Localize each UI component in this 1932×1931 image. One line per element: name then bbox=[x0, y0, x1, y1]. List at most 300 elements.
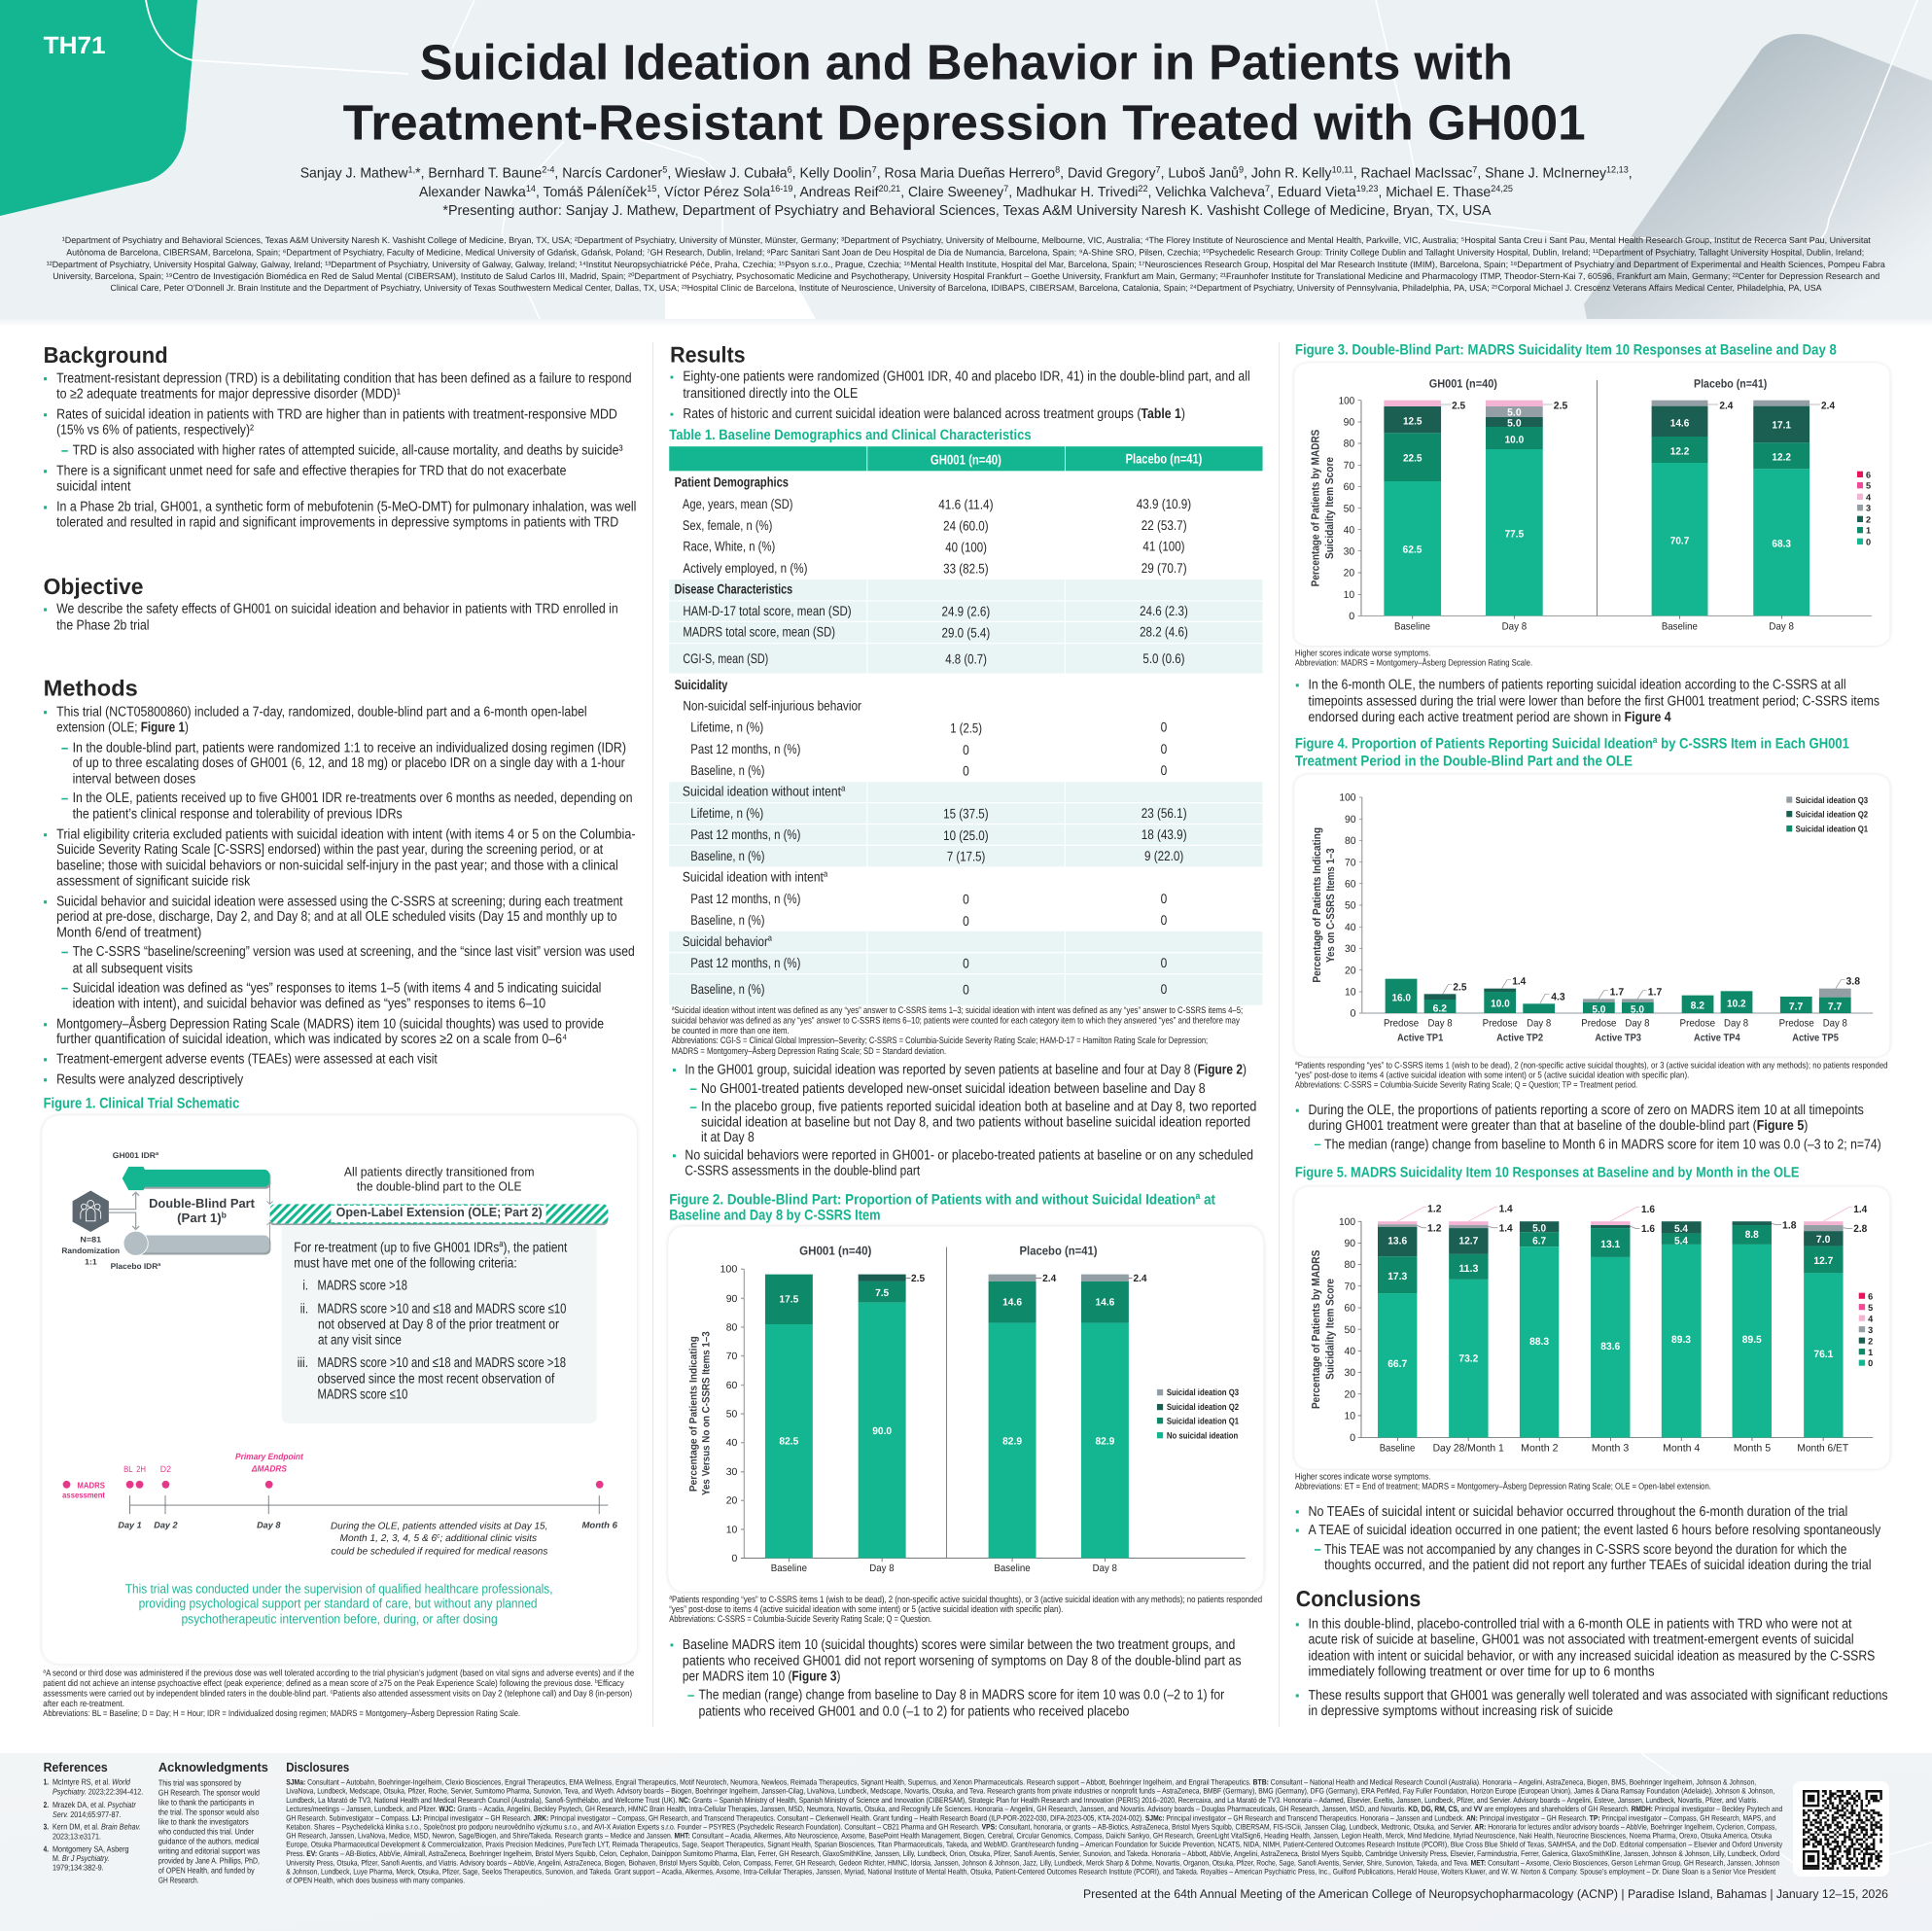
schematic labels: assessment bbox=[62, 1491, 105, 1500]
shaded rows bbox=[669, 579, 1263, 1005]
chart labels: 50 bbox=[1345, 899, 1355, 911]
schematic labels: 2H bbox=[136, 1464, 146, 1474]
chart labels: Month 6/ET bbox=[1797, 1442, 1848, 1454]
text block: references list: 1979;134:382-9. bbox=[53, 1863, 104, 1873]
chart labels: 7.7 bbox=[1789, 1001, 1803, 1012]
icon: QR code bbox=[1793, 1781, 1889, 1877]
y-axis title bbox=[1310, 1250, 1336, 1409]
schematic labels: Day 1 bbox=[118, 1521, 142, 1530]
text block: results bullets bbox=[670, 369, 1250, 421]
text block: methods bullets: ideation with intent), and suicidal behavior was defined as “yes” responses to items 6–10 bbox=[73, 995, 545, 1011]
chart labels: 10.2 bbox=[1727, 998, 1746, 1009]
y-axis title: Percentage of Patients Indicating bbox=[686, 1336, 699, 1492]
chart labels: 5.0 bbox=[1592, 1003, 1605, 1015]
chart labels: 7.5 bbox=[875, 1287, 889, 1298]
text block: references list: 4. bbox=[44, 1844, 49, 1853]
chart labels: 30 bbox=[726, 1466, 737, 1478]
table text bbox=[675, 451, 1202, 998]
schematic labels: ΔMADRS bbox=[252, 1464, 287, 1474]
text block: methods bullets: extension (OLE; Figure 1) bbox=[56, 719, 189, 735]
text block: methods bullets: The C-SSRS “baseline/screening” version was used at screening, and the “since last visit” version was used bbox=[73, 943, 635, 959]
table text: 0 bbox=[1161, 742, 1167, 756]
schematic labels: could be scheduled if required for medical reasons bbox=[331, 1545, 548, 1557]
chart labels: 12.7 bbox=[1813, 1254, 1833, 1266]
chart labels: 50 bbox=[726, 1408, 737, 1420]
text block: Table 1 footnotes: Abbreviations: CGI-S = Clinical Global Impression–Severity; C-SSRS = Columbia-Suicide Severity Rating Scale; HAM-D-17 = Hamilton Rating Scale for Depression; bbox=[672, 1036, 1208, 1046]
chart labels: 2.4 bbox=[1719, 400, 1734, 411]
text block: Figure 1 footnotes: Abbreviations: BL = Baseline; D = Day; H = Hour; IDR = Individualized dosing regimen; MADRS = Montgomery–Åsberg Depression Rating Scale. bbox=[43, 1708, 520, 1718]
table text: Age, years, mean (SD) bbox=[683, 497, 793, 511]
table text: 28.2 (4.6) bbox=[1140, 625, 1188, 640]
panel: acknowledgments bbox=[158, 1760, 268, 1885]
bar: open-label extension bbox=[270, 1204, 608, 1225]
chart labels: Suicidal ideation Q3 bbox=[1796, 795, 1868, 805]
schematic labels: During the OLE, patients attended visits at Day 15, bbox=[331, 1520, 547, 1531]
chart labels: 5 bbox=[1868, 1303, 1873, 1313]
text block: Table 1 footnotes: aSuicidal ideation without intent was defined as any “yes” answer to C-SSRS items 1–3; suicidal ideation with intent was defined as any “yes” answer to C-SSRS items 4–5; bbox=[672, 1004, 1243, 1016]
chart: Figure 5 stacked bars bbox=[1294, 1187, 1889, 1469]
text block: Figure 1 footnotes: patient did not achieve an intense psychoactive effect (peak experience; defined as a mean score of ≥75 on the Peak Experience Scale) following the previous dose. bEfficacy bbox=[43, 1678, 624, 1688]
text block: methods bullets: Montgomery–Åsberg Depression Rating Scale (MADRS) item 10 (suicidal thoughts) was used to provide bbox=[56, 1015, 604, 1032]
table text: Suicidal behaviora bbox=[683, 933, 772, 949]
table text: 23 (56.1) bbox=[1142, 806, 1187, 821]
heading: Figure 4: Treatment Period in the Double-Blind Part and the OLE bbox=[1295, 753, 1633, 769]
text block: Figure 3 footnotes bbox=[1295, 648, 1532, 667]
chart labels: 8.8 bbox=[1745, 1229, 1759, 1241]
text block: results bullets after Table 1: No suicidal behaviors were reported in GH001- or placebo-treated patients at baseline or on any scheduled bbox=[685, 1147, 1253, 1163]
text block: references list: Psychiatry. 2023;22:394-412. bbox=[53, 1787, 143, 1797]
chart labels: 0 bbox=[1349, 610, 1354, 621]
text block: Figure 2 footnotes: aPatients responding “yes” to C-SSRS items 1 (wish to be dead), 2 (non-specific active suicidal thoughts), or 3 (active suicidal ideation with any methods); no patients responded bbox=[669, 1594, 1262, 1604]
chart labels: 70 bbox=[1345, 857, 1355, 868]
table text: 9 (22.0) bbox=[1144, 849, 1183, 863]
chart labels: 10 bbox=[1345, 1410, 1355, 1422]
chart labels: 2.8 bbox=[1853, 1223, 1867, 1234]
chart labels: 3 bbox=[1866, 504, 1871, 513]
chart labels: 73.2 bbox=[1458, 1352, 1478, 1364]
table text: 18 (43.9) bbox=[1142, 827, 1187, 842]
chart labels: Active TP2 bbox=[1496, 1032, 1543, 1043]
chart labels: 0 bbox=[732, 1553, 737, 1563]
table text: 41 (100) bbox=[1142, 540, 1185, 554]
chart labels: Predose bbox=[1680, 1017, 1715, 1029]
chart labels: Month 4 bbox=[1663, 1442, 1700, 1454]
chart labels: 1.4 bbox=[1499, 1222, 1513, 1234]
chart labels: Day 8 bbox=[1427, 1017, 1453, 1029]
text block: background bullets: TRD is also associated with higher rates of attempted suicide, all-cause mortality, and deaths by suicide³ bbox=[73, 441, 623, 458]
table text: 5.0 (0.6) bbox=[1142, 651, 1185, 666]
text block: methods bullets: baseline; those with suicidal behaviors or non-suicidal self-injury in the past year; and those with a clinical bbox=[56, 857, 618, 872]
text block: Figure 5 footnotes: Higher scores indicate worse symptoms. bbox=[1295, 1471, 1430, 1482]
schematic labels: Day 8 bbox=[257, 1521, 281, 1530]
heading: Figure 4 bbox=[1295, 735, 1849, 769]
chart labels: 5.0 bbox=[1532, 1222, 1546, 1234]
bar: GH001 day 8 bbox=[859, 1275, 906, 1558]
affiliations: University, Barcelona, Spain; ¹⁹Centro de Investigación Biomédica en Red de Salud Mental (CIBERSAM), Instituto de Salud Carlos III, Madrid, Spain; ²⁰Department of Psychiatry, Psychosomatic Medicine and Psychotherapy, University Hospital Frankfurt – Goethe University, Frankfurt am Main, Germany; ²¹Fraunhofer Institute for Translational Medicine and Pharmacology ITMP, Theodor-Stern-Kai 7, 60596, Frankfurt am Main, Germany; ²²Center for Depression Research and bbox=[53, 271, 1879, 281]
chart labels: Day 8 bbox=[869, 1562, 895, 1573]
chart labels: Baseline bbox=[994, 1562, 1031, 1573]
text block: methods bullets: further quantification of suicidal ideation, which was indicated by scores ≥2 on a scale from 0–6⁴ bbox=[56, 1031, 567, 1046]
panel: right column upper bbox=[1294, 341, 1889, 724]
bars: Active TP1 bbox=[1386, 979, 1456, 1013]
chart labels: 1.4 bbox=[1853, 1204, 1867, 1215]
chart labels: 40 bbox=[726, 1437, 737, 1448]
heading: Background: Background bbox=[44, 342, 168, 368]
text block: acknowledgments: writing and editorial support was bbox=[158, 1846, 260, 1856]
chart labels: 2.5 bbox=[1452, 400, 1465, 411]
text block: methods bullets: assessment of significant suicide risk bbox=[56, 872, 250, 889]
chart labels: 2 bbox=[1868, 1336, 1873, 1347]
chart labels: Suicidal ideation Q2 bbox=[1796, 810, 1868, 820]
chart labels: Suicidal ideation Q1 bbox=[1167, 1417, 1239, 1426]
chart labels: Day 8 bbox=[1823, 1017, 1847, 1029]
chart labels: 20 bbox=[1345, 965, 1355, 976]
table text: Actively employed, n (%) bbox=[683, 561, 807, 576]
chart labels: 17.1 bbox=[1772, 419, 1791, 431]
text block: background bullets: to ≥2 adequate treatments for major depressive disorder (MDD)¹ bbox=[56, 385, 401, 402]
text block: Table 1 footnotes: MADRS = Montgomery–Åsberg Depression Rating Scale; SD = Standard deviation. bbox=[672, 1045, 946, 1056]
heading: Objective: Objective bbox=[44, 574, 143, 599]
table text: 10 (25.0) bbox=[943, 828, 989, 843]
bar: baseline bbox=[1378, 1221, 1417, 1438]
table text: 0 bbox=[963, 764, 969, 779]
table text: 29.0 (5.4) bbox=[942, 626, 990, 641]
y-axis title: Suicidality Item Score bbox=[1323, 1279, 1336, 1380]
chart labels: Predose bbox=[1384, 1017, 1419, 1029]
arm: GH001 IDR bar bbox=[123, 1167, 270, 1190]
heading: Results: Results bbox=[670, 343, 746, 368]
chart labels: 2.4 bbox=[1133, 1273, 1147, 1283]
text block: methods bullets: In the double-blind part, patients were randomized 1:1 to receive an individualized dosing regimen (IDR) bbox=[73, 739, 626, 755]
text block: objective bullet: the Phase 2b trial bbox=[56, 616, 150, 633]
text block: methods bullets: at all subsequent visits bbox=[73, 960, 193, 976]
schematic labels: observed since the most recent observation of bbox=[318, 1370, 555, 1386]
chart labels: 12.2 bbox=[1772, 451, 1791, 463]
chart labels: 82.9 bbox=[1002, 1435, 1022, 1447]
chart labels: 4 bbox=[1868, 1314, 1873, 1324]
text block: methods bullets: period at pre-dose, discharge, Day 2, and Day 8; and at all OLE scheduled visits (Day 15 and monthly up to bbox=[56, 908, 616, 924]
title bbox=[343, 35, 1586, 150]
chart labels: 22.5 bbox=[1403, 452, 1423, 464]
chart labels: 60 bbox=[1344, 480, 1354, 492]
chart labels: Month 3 bbox=[1592, 1442, 1629, 1454]
text block: background bullets: There is a significant unmet need for safe and effective therapies for TRD that do not exacerbate bbox=[56, 462, 566, 478]
chart labels: 10 bbox=[1344, 588, 1354, 600]
corner badge: TH71: TH71 bbox=[44, 32, 106, 59]
chart: Figure 2 stacked bars bbox=[668, 1227, 1263, 1592]
heading: Figure 5: Figure 5. MADRS Suicidality Item 10 Responses at Baseline and by Month in the OLE bbox=[1295, 1164, 1799, 1180]
chart labels: 2.5 bbox=[1554, 400, 1567, 411]
text block: references list: 1. bbox=[44, 1777, 49, 1787]
schematic labels: This trial was conducted under the supervision of qualified healthcare professionals, bbox=[125, 1581, 553, 1596]
text block: background bullets: (15% vs 6% of patients, respectively)² bbox=[56, 422, 254, 438]
text block: disclosures bbox=[286, 1778, 1782, 1885]
text block: Figure 5 footnotes bbox=[1295, 1471, 1711, 1492]
text block: Figure 2 footnotes: “yes” post-dose to items 4 (active suicidal ideation with some intent) or 5 (active suicidal ideation with specific plan). bbox=[669, 1604, 1063, 1615]
table text: 22 (53.7) bbox=[1142, 518, 1187, 533]
chart labels bbox=[1339, 791, 1868, 1043]
table text: 0 bbox=[963, 743, 969, 757]
chart labels: 17.5 bbox=[779, 1294, 798, 1305]
table text: Sex, female, n (%) bbox=[683, 518, 772, 533]
table text: Baseline, n (%) bbox=[690, 849, 765, 863]
panel: disclosures bbox=[286, 1760, 1782, 1885]
text block: methods bullets: Results were analyzed descriptively bbox=[56, 1071, 243, 1087]
text block: TEAE bullets bbox=[1296, 1503, 1880, 1572]
heading: Figure 2 bbox=[669, 1191, 1215, 1223]
chart labels: 13.6 bbox=[1388, 1235, 1407, 1246]
chart labels: 6 bbox=[1868, 1291, 1873, 1302]
schematic labels: Randomization bbox=[61, 1246, 120, 1255]
text block: methods bullets: Suicide Severity Rating Scale [C-SSRS] endorsed) within the past year, during the screening period, or at bbox=[56, 841, 603, 857]
y-axis title: Yes on C-SSRS Items 1–3 bbox=[1324, 848, 1336, 963]
schematic labels: Day 2 bbox=[154, 1521, 178, 1530]
text block: acknowledgments: who conducted this trial. Under bbox=[158, 1827, 254, 1837]
table text: Past 12 months, n (%) bbox=[690, 892, 800, 906]
y-axis title: Percentage of Patients Indicating bbox=[1311, 827, 1322, 983]
chart labels: 20 bbox=[1345, 1388, 1355, 1400]
y-axis title bbox=[1311, 827, 1336, 983]
chart labels: 4 bbox=[1866, 492, 1871, 502]
panel: references bbox=[44, 1760, 143, 1873]
text block: methods bullets: Trial eligibility criteria excluded patients with suicidal ideation with intent (with items 4 or 5 on the Columbia- bbox=[56, 825, 636, 842]
chart labels: 90 bbox=[726, 1293, 737, 1304]
schematic labels: MADRS score >18 bbox=[318, 1277, 407, 1292]
chart: Figure 4 bars bbox=[1294, 775, 1889, 1057]
legend bbox=[1157, 1389, 1163, 1438]
text block: Figure 4 footnotes: Abbreviations: C-SSRS = Columbia-Suicide Severity Rating Scale; Q = Question; TP = Treatment period. bbox=[1295, 1079, 1637, 1089]
schematic labels: Placebo IDRa bbox=[111, 1261, 160, 1271]
chart labels: Active TP1 bbox=[1397, 1032, 1443, 1043]
timeline dots bbox=[63, 1481, 604, 1489]
chart labels: 0 bbox=[1866, 538, 1871, 547]
text block: results bullets after Table 1: No GH001-treated patients developed new-onset suicidal ideation between baseline and Day 8 bbox=[701, 1080, 1206, 1096]
chart labels: No suicidal ideation bbox=[1167, 1431, 1238, 1441]
affiliations: Clinical Care, Peter O’Donnell Jr. Brain Institute and the Department of Psychiatry, University of Texas Southwestern Medical Center, Dallas, TX, USA; ²³Hospital Clinic de Barcelona, Institute of Neuroscience, University of Barcelona, IDIBAPS, CIBERSAM, Barcelona, Catalonia, Spain; ²⁴Department of Psychiatry, University of Pennsylvania, Philadelphia, PA, USA; ²⁵Corporal Michael J. Crescenz Veterans Affairs Medical Center, Philadelphia, PA, USA bbox=[111, 283, 1822, 293]
chart labels: Day 8 bbox=[1527, 1017, 1551, 1029]
bar: day 28/month 1 bbox=[1449, 1221, 1489, 1438]
chart labels: 14.6 bbox=[1095, 1296, 1114, 1308]
table text: 0 bbox=[963, 892, 969, 907]
text block: OLE C-SSRS bullet bbox=[1296, 677, 1879, 724]
text block: Table 1 footnotes: be counted in more than one item. bbox=[672, 1026, 790, 1036]
bar: month 6/ET bbox=[1804, 1221, 1844, 1438]
chart labels: 20 bbox=[726, 1494, 737, 1506]
chart labels: GH001 (n=40) bbox=[1429, 377, 1497, 390]
chart labels: 6.7 bbox=[1532, 1235, 1546, 1246]
table text: 43.9 (10.9) bbox=[1137, 497, 1191, 511]
legend bbox=[1857, 472, 1863, 544]
chart labels: Day 28/Month 1 bbox=[1433, 1442, 1504, 1454]
chart labels: 5.4 bbox=[1674, 1223, 1688, 1234]
chart labels: 14.6 bbox=[1670, 417, 1689, 429]
schematic labels: ii. bbox=[300, 1300, 308, 1316]
schematic labels: BL bbox=[123, 1464, 133, 1474]
chart labels: 5.0 bbox=[1507, 417, 1522, 429]
chart labels: 0 bbox=[1350, 1432, 1355, 1443]
chart labels: Baseline bbox=[1394, 620, 1430, 632]
chart labels: 1.6 bbox=[1641, 1204, 1655, 1215]
schematic labels: MADRS score ≤10 bbox=[318, 1386, 407, 1401]
chart labels: 66.7 bbox=[1388, 1357, 1407, 1369]
chart labels: 5.4 bbox=[1674, 1235, 1688, 1246]
text block: results bullets after Table 1 bbox=[673, 1062, 1256, 1178]
text block: MADRS baseline bullets bbox=[670, 1636, 1242, 1719]
axes bbox=[741, 1269, 744, 1558]
table text: Past 12 months, n (%) bbox=[690, 827, 800, 842]
schematic labels: Month 1, 2, 3, 4, 5 & 6c; additional clinic visits bbox=[340, 1532, 537, 1543]
schematic labels: N=81 bbox=[80, 1236, 101, 1245]
chart labels: Suicidal ideation Q1 bbox=[1796, 825, 1868, 834]
heading: Figure 1: Figure 1. Clinical Trial Schematic bbox=[44, 1095, 239, 1111]
chart labels: 1 bbox=[1868, 1348, 1873, 1357]
chart labels: 60 bbox=[1345, 1302, 1355, 1314]
text block: acknowledgments: of OPEN Health, and funded by bbox=[158, 1866, 255, 1876]
chart labels: 90.0 bbox=[872, 1425, 892, 1436]
chart labels: 12.2 bbox=[1670, 445, 1689, 457]
bars: Active TP3 bbox=[1583, 999, 1654, 1013]
bar: month 2 bbox=[1520, 1221, 1559, 1438]
table text: Past 12 months, n (%) bbox=[690, 956, 800, 970]
chart labels: Placebo (n=41) bbox=[1020, 1244, 1098, 1257]
chart labels: 5.0 bbox=[1631, 1003, 1644, 1015]
text block: conclusions bullets: in depressive symptoms without increasing risk of suicide bbox=[1309, 1703, 1613, 1718]
chart labels: 4.3 bbox=[1551, 991, 1565, 1002]
panel: results column lower bbox=[668, 1004, 1263, 1719]
authors: Alexander Nawka14, Tomáš Páleníček15, Víctor Pérez Sola16-19, Andreas Reif20,21, Claire Sweeney7, Madhukar H. Trivedi22, Velichka Valcheva7, Eduard Vieta19,23, Michael E. Thase24,25 bbox=[419, 182, 1513, 200]
text block: Table 1 footnotes: suicidal behavior was defined as any “yes” answer to C-SSRS items 6–10; patients were counted for each category item to which they answered “yes” and therefore may bbox=[672, 1015, 1240, 1026]
chart labels: 10 bbox=[726, 1524, 737, 1535]
chart labels: 2.5 bbox=[911, 1273, 925, 1283]
bars: Active TP5 bbox=[1780, 989, 1851, 1013]
chart labels: Placebo (n=41) bbox=[1694, 377, 1767, 390]
chart labels: Day 8 bbox=[1502, 620, 1527, 632]
text block: acknowledgments: guidance of the authors, medical bbox=[158, 1837, 260, 1846]
chart labels: Day 8 bbox=[1093, 1562, 1117, 1573]
panel: disclosures: Disclosures bbox=[286, 1760, 349, 1774]
text block: methods bullets bbox=[44, 703, 636, 1087]
chart labels: 100 bbox=[720, 1263, 737, 1275]
chart labels: 14.6 bbox=[1002, 1296, 1022, 1308]
table text: 0 bbox=[963, 956, 969, 971]
chart labels bbox=[1339, 1203, 1873, 1454]
text block: results bullets after Table 1: C-SSRS assessments in the double-blind part bbox=[685, 1163, 920, 1178]
schematic labels bbox=[61, 1150, 617, 1627]
text block: acknowledgments: the trial. The sponsor would also bbox=[158, 1808, 260, 1817]
text block: Table 1 footnotes bbox=[672, 1004, 1243, 1056]
text block: Figure 1 footnotes: after each re-treatment. bbox=[43, 1699, 124, 1708]
schematic labels: (Part 1)b bbox=[177, 1211, 227, 1225]
heading: References: References bbox=[44, 1760, 108, 1774]
schematic labels: Month 6 bbox=[581, 1521, 617, 1530]
text block: OLE C-SSRS bullet: endorsed during each active treatment period are shown in Figure 4 bbox=[1309, 709, 1671, 724]
table text: 40 (100) bbox=[945, 541, 987, 555]
chart labels: 100 bbox=[1339, 1215, 1355, 1227]
table text: MADRS total score, mean (SD) bbox=[683, 625, 835, 640]
chart labels: 50 bbox=[1345, 1323, 1355, 1335]
affiliations: ¹²Department of Psychiatry, University Hospital Galway, Galway, Ireland; ¹³Department of Psychiatry, University of Galway, Galway, Ireland; ¹⁴Institut Neuropsychiatrické Péče, Praha, Czechia; ¹⁵Psyon s.r.o., Prague, Czechia; ¹⁶Mental Health Institute, Hospital del Mar, Barcelona, Spain; ¹⁷Neurosciences Research Group, Hospital del Mar Research Institute (IMIM), Barcelona, Spain; ¹⁸Department of Psychiatry and Department of Experimental and Health Sciences, Pompeu Fabra bbox=[47, 260, 1885, 269]
bar: GH001 day 8 bbox=[1486, 401, 1543, 615]
chart labels bbox=[720, 1244, 1239, 1573]
chart labels: 7.0 bbox=[1816, 1234, 1830, 1245]
chart labels: 5 bbox=[1866, 481, 1871, 491]
table text: 0 bbox=[1161, 892, 1167, 906]
chart labels: 2.5 bbox=[1453, 981, 1466, 993]
chart labels: Day 8 bbox=[1724, 1017, 1748, 1029]
chart labels: 6 bbox=[1866, 470, 1871, 479]
chart labels: 10.0 bbox=[1491, 998, 1510, 1009]
chart labels: Predose bbox=[1581, 1017, 1616, 1029]
schematic labels: not observed at Day 8 of the prior treatment or bbox=[318, 1316, 559, 1331]
text block: background bullets: tolerated and resulted in rapid and significant improvements in depressive symptoms in patients with TRD bbox=[56, 513, 618, 529]
chart labels: 6.2 bbox=[1433, 1002, 1447, 1014]
chart labels: 77.5 bbox=[1505, 528, 1524, 540]
schematic labels: providing psychological support per standard of care, but without any planned bbox=[139, 1596, 537, 1610]
chart labels: 7.7 bbox=[1828, 1001, 1842, 1012]
text block: references list bbox=[44, 1777, 143, 1873]
text block: objective bullet: We describe the safety effects of GH001 on suicidal ideation and behavior in patients with TRD enrolled in bbox=[56, 601, 618, 616]
table text: GH001 (n=40) bbox=[931, 452, 1001, 468]
chart labels bbox=[1339, 377, 1871, 632]
text block: references list: Kern DM, et al. Brain Behav. bbox=[53, 1822, 141, 1832]
schematic labels: must have met one of the following criteria: bbox=[294, 1254, 517, 1271]
table text: 15 (37.5) bbox=[943, 806, 989, 822]
chart labels: 82.5 bbox=[779, 1435, 798, 1447]
text block: Figure 1 footnotes bbox=[43, 1668, 634, 1718]
text block: background bullets: suicidal intent bbox=[56, 478, 131, 494]
schematic labels: For re-treatment (up to five GH001 IDRsa), the patient bbox=[294, 1239, 567, 1254]
affiliations: ¹Department of Psychiatry and Behavioral Sciences, Texas A&M University Naresh K. Vashisht College of Medicine, Bryan, TX, USA; ²Department of Psychiatry, University of Münster, Münster, Germany; ³Department of Psychiatry, University of Melbourne, Melbourne, VIC, Australia; ⁴The Florey Institute of Neuroscience and Mental Health, Parkville, VIC, Australia; ⁵Hospital Santa Creu i Sant Pau, Mental Health Research Group, Institut de Recerca Sant Pau, Universitat bbox=[62, 235, 1871, 245]
chart labels: 68.3 bbox=[1772, 538, 1791, 549]
heading: Figure 2: Figure 2. Double-Blind Part: Proportion of Patients with and without Suicidal Ideation a at bbox=[669, 1191, 1215, 1208]
text block: Figure 4 footnotes bbox=[1295, 1060, 1888, 1089]
text block: acknowledgments: like to thank the participants in bbox=[158, 1798, 254, 1808]
text block: acknowledgments: GH Research. bbox=[158, 1876, 198, 1885]
meeting line: Presented at the 64th Annual Meeting of the American College of Neuropsychopharmacology (ACNP) | Paradise Island, Bahamas | January 12–15, 2026 bbox=[1083, 1887, 1888, 1901]
chart labels: 62.5 bbox=[1403, 544, 1423, 555]
chart labels: 12.5 bbox=[1403, 415, 1423, 427]
chart labels: Baseline bbox=[771, 1562, 807, 1573]
schematic labels: Primary Endpoint bbox=[235, 1452, 303, 1461]
table text: 24 (60.0) bbox=[943, 518, 989, 534]
table text: 1 (2.5) bbox=[950, 720, 982, 736]
table text: Baseline, n (%) bbox=[690, 913, 765, 928]
chart labels: 30 bbox=[1345, 1367, 1355, 1378]
chart labels: 83.6 bbox=[1600, 1340, 1620, 1352]
y-axis title bbox=[686, 1331, 712, 1495]
text block: background bullets: Treatment-resistant depression (TRD) is a debilitating condition that has been defined as a failure to respond bbox=[56, 369, 632, 385]
chart labels: 1 bbox=[1866, 526, 1871, 536]
authors: *Presenting author: Sanjay J. Mathew, Department of Psychiatry and Behavioral Sciences, Texas A&M University Naresh K. Vashisht College of Medicine, Bryan, TX, USA bbox=[442, 203, 1492, 219]
table text: 0 bbox=[1161, 982, 1167, 997]
bars: Active TP2 bbox=[1484, 989, 1555, 1013]
text block: Figure 1 footnotes: aA second or third dose was administered if the previous dose was well tolerated according to the trial physician’s judgment (based on vital signs and adverse events) and if the bbox=[43, 1668, 634, 1678]
text block: objective bullet bbox=[44, 601, 618, 633]
table text: CGI-S, mean (SD) bbox=[683, 651, 768, 666]
panel: Figure 5 and conclusions bbox=[1294, 1164, 1889, 1718]
text block: Figure 5 footnotes: Abbreviations: ET = End of treatment; MADRS = Montgomery–Åsberg Depression Rating Scale; OLE = Open-label extension. bbox=[1295, 1481, 1711, 1492]
timeline axis bbox=[130, 1495, 608, 1514]
chart labels: 70.7 bbox=[1670, 535, 1689, 546]
title: Suicidal Ideation and Behavior in Patients with bbox=[420, 35, 1513, 90]
text block: methods bullets: Month 6/end of treatment) bbox=[56, 924, 201, 939]
panel: Figure 1 clinical trial schematic bbox=[42, 1115, 637, 1718]
chart labels: Baseline bbox=[1662, 620, 1698, 632]
table text: 0 bbox=[963, 982, 969, 998]
text block: background bullets: Rates of suicidal ideation in patients with TRD are higher than in patients with treatment-responsive MDD bbox=[56, 405, 617, 422]
chart labels: 12.7 bbox=[1458, 1235, 1478, 1246]
chart labels: 1.7 bbox=[1648, 986, 1662, 998]
